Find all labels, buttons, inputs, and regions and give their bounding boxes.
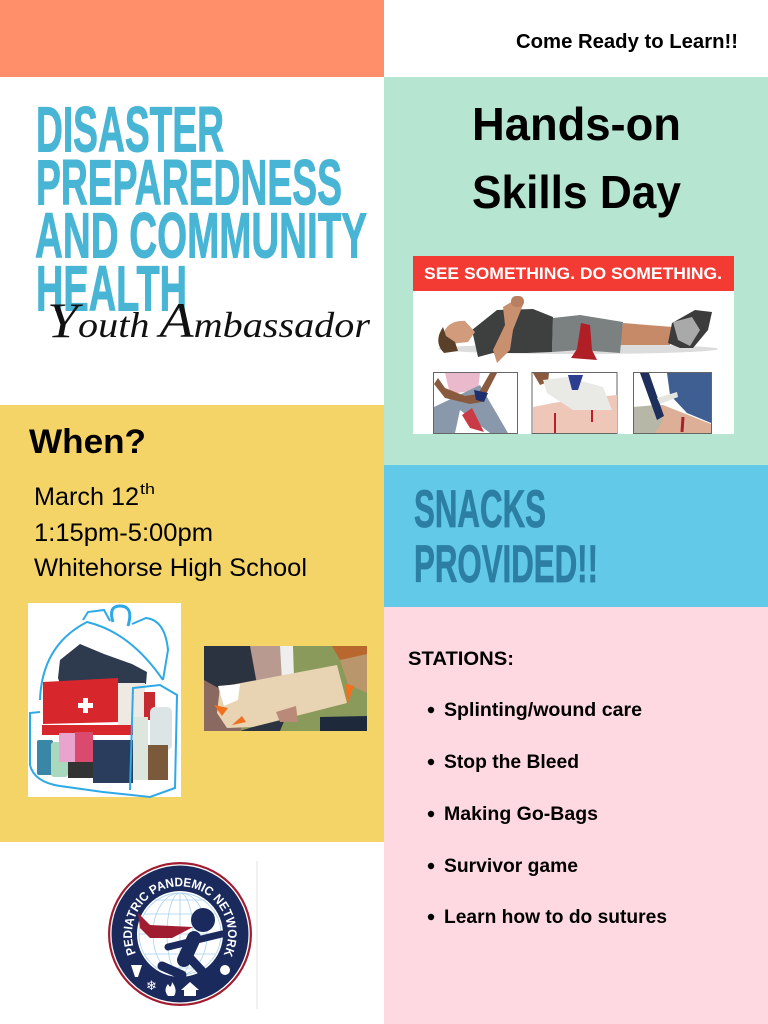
heading: disaster preparedness and community health: HEALTH	[36, 252, 187, 324]
list: stations list: Splinting/wound care	[444, 699, 642, 721]
icon: hazard symbols	[131, 965, 230, 996]
icon: pressure panel one	[434, 372, 518, 434]
photo: splinted arm	[204, 646, 367, 731]
text block: date, time and location: March 12	[34, 483, 139, 511]
heading: hands-on skills day: Skills Day	[472, 166, 681, 218]
panel: snacks provided	[384, 465, 768, 607]
heading: hands-on skills day: Hands-on	[472, 98, 681, 150]
heading: snacks provided: SNACKS	[414, 480, 546, 539]
icon: pressure panel two	[532, 372, 617, 434]
panel: title	[35, 94, 371, 348]
list: stations list: Survivor game	[444, 855, 578, 877]
panel: orange header block	[0, 0, 384, 77]
panel: hands-on skills day	[384, 77, 768, 465]
heading: disaster preparedness and community health	[35, 94, 367, 324]
heading: disaster preparedness and community health: PREPAREDNESS	[36, 146, 342, 218]
heading: disaster preparedness and community health: AND COMMUNITY	[35, 200, 367, 272]
heading: when: When?	[29, 423, 146, 461]
list: stations list: Stop the Bleed	[444, 751, 579, 773]
tagline: come ready to learn: Come Ready to Learn!!	[516, 31, 738, 53]
list: stations list	[428, 699, 667, 928]
heading: hands-on skills day	[472, 98, 681, 218]
list: stations list: Learn how to do sutures	[444, 906, 667, 928]
text block: date, time and location: Whitehorse High School	[34, 554, 307, 582]
heading: stations: STATIONS:	[408, 648, 514, 670]
text block: date, time and location	[34, 482, 307, 582]
heading: snacks provided: PROVIDED!!	[414, 535, 598, 594]
icon: tourniquet panel	[634, 372, 712, 434]
panel: when details	[0, 405, 384, 842]
text block: date, time and location: 1:15pm-5:00pm	[34, 519, 213, 547]
panel: stations	[384, 607, 768, 1024]
subtitle: youth ambassador script: Youth Ambassador	[47, 292, 371, 348]
icon: injured man lying down	[438, 296, 718, 363]
illustration: stop the bleed poster	[413, 256, 734, 434]
heading: disaster preparedness and community health: DISASTER	[36, 94, 224, 166]
logo: pediatric pandemic network	[108, 861, 258, 1009]
text block: date, time and location: th	[140, 482, 155, 498]
heading: snacks provided	[414, 480, 598, 594]
illustration: stop the bleed poster: SEE SOMETHING. DO SOMETHING.	[424, 265, 722, 283]
icon: hazard symbols: ❄	[146, 979, 157, 994]
logo: pediatric pandemic network: PEDIATRIC PANDEMIC NETWORK	[123, 878, 237, 958]
list: stations list: Making Go-Bags	[444, 803, 598, 825]
icon: caped runner	[138, 908, 222, 981]
illustration: go-bag backpack	[28, 603, 181, 797]
